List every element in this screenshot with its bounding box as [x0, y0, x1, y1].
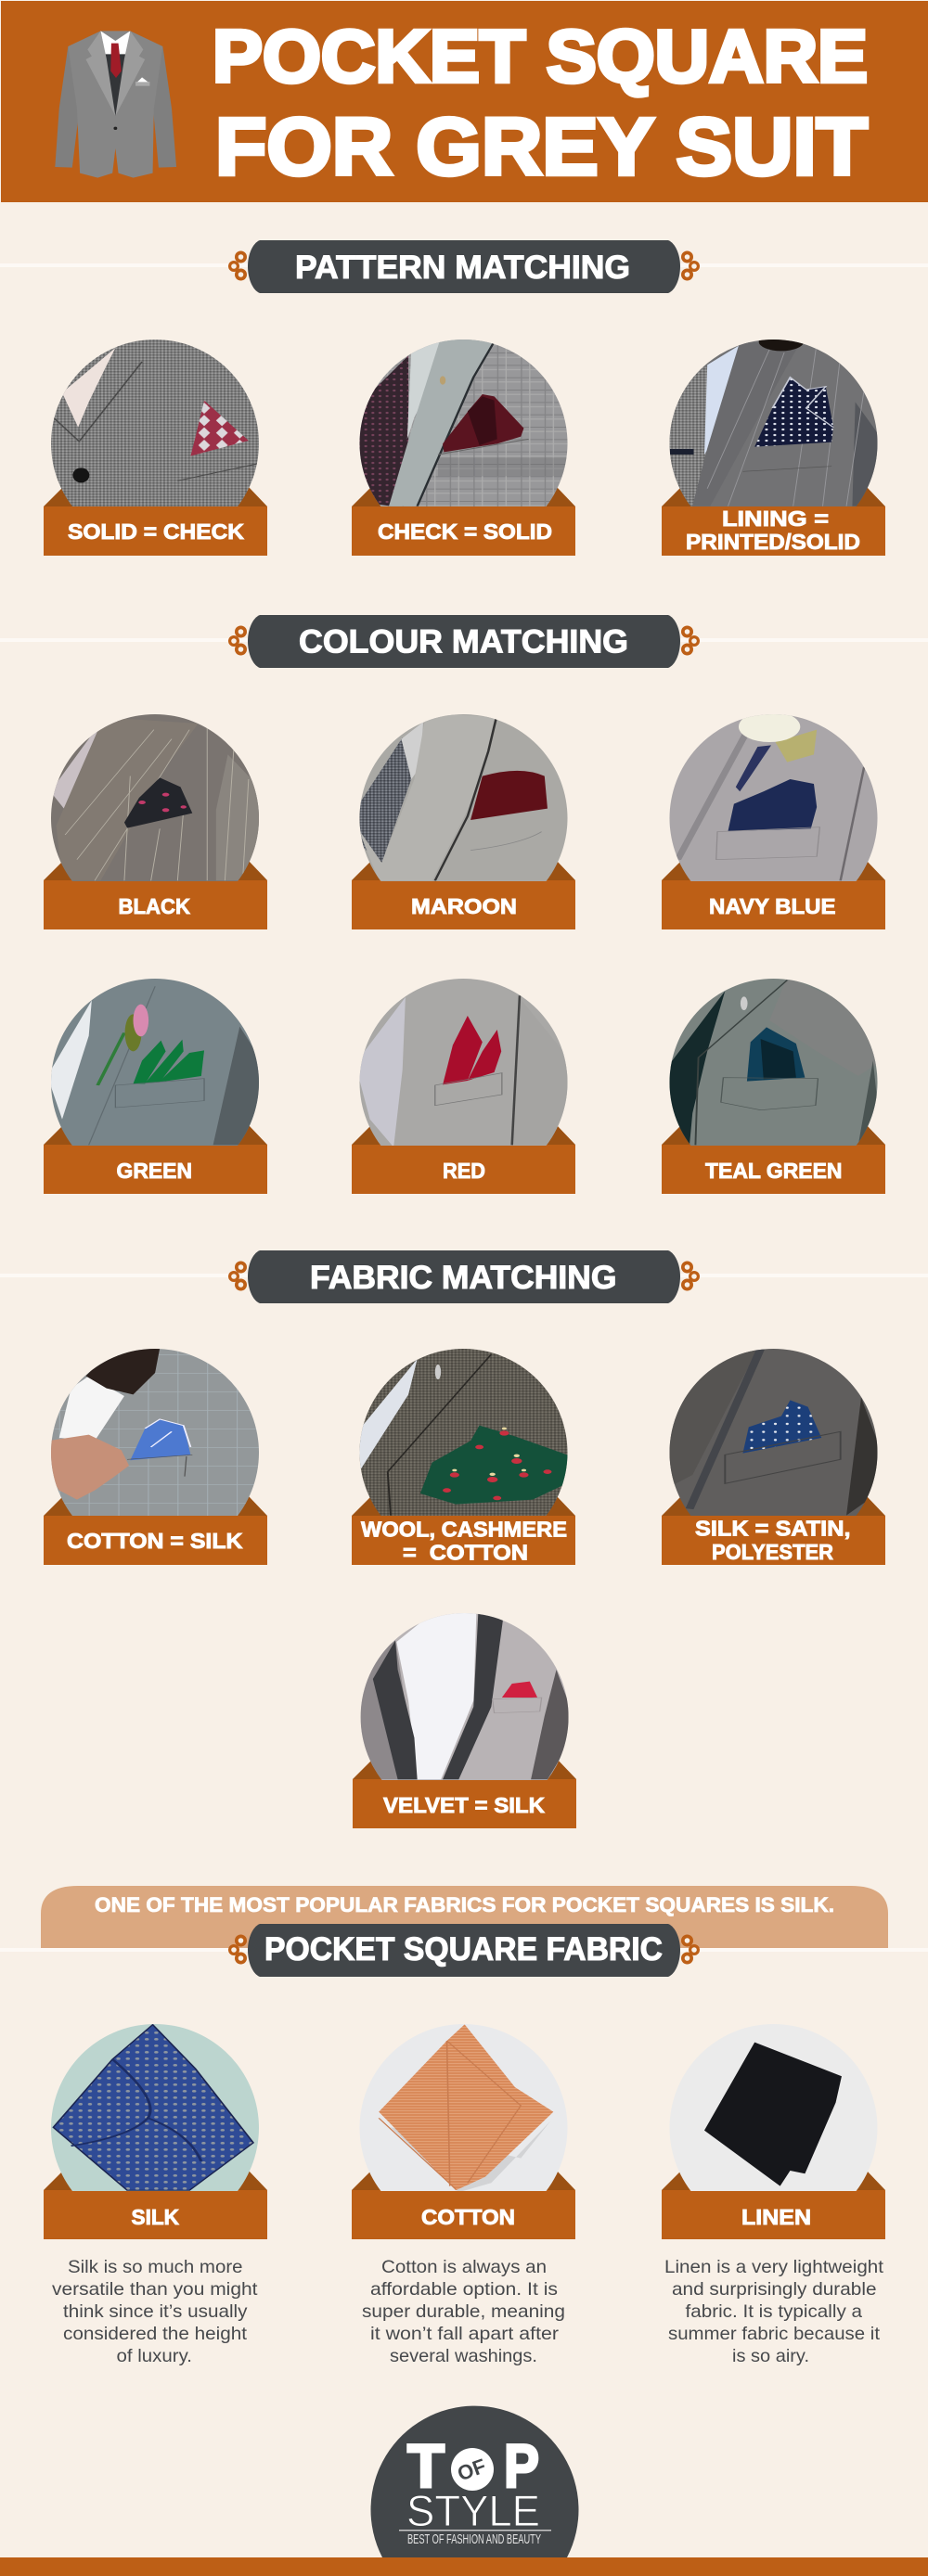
heading: pattern matching [228, 240, 700, 293]
text block: considered the height [63, 2324, 248, 2344]
label: LINING = [722, 506, 829, 531]
footer bar [0, 2557, 928, 2576]
photo: dark grey jacket with dotted blue square [670, 1349, 878, 1516]
photo: orange cotton square [360, 2024, 568, 2191]
label [686, 506, 860, 554]
label: POLYESTER [712, 1540, 833, 1564]
photo: man adjusting blue square [51, 1349, 259, 1516]
label: CHECK = SOLID [378, 519, 552, 544]
photo: plaid jacket with maroon square [360, 340, 568, 506]
photo: linen jacket with maroon square [360, 714, 568, 881]
photo: light grey jacket with red square [360, 979, 568, 1146]
icon: grey suit jacket [55, 31, 176, 178]
logo: top of style [371, 2406, 578, 2557]
heading: fabric matching: FABRIC MATCHING [310, 1260, 616, 1296]
text block [664, 2257, 884, 2366]
card: linen [662, 2024, 885, 2365]
card: green [44, 979, 267, 1194]
section lines [0, 263, 928, 1277]
text block: summer fabric because it [668, 2324, 881, 2344]
label: WOOL, CASHMERE [361, 1518, 567, 1542]
heading: fabric matching [228, 1250, 700, 1303]
text block: super durable, meaning [362, 2301, 565, 2322]
card: teal green [662, 979, 885, 1194]
label: COTTON [421, 2205, 515, 2229]
card: silk = satin, polyester [662, 1349, 885, 1565]
label: PRINTED/SOLID [686, 530, 860, 554]
card: solid = check [44, 340, 267, 556]
logo: top of style: T [407, 2431, 445, 2500]
photo: grey-green jacket with teal square [670, 979, 878, 1146]
heading: pocket square fabric: POCKET SQUARE FABRIC [264, 1931, 663, 1967]
label: TEAL GREEN [705, 1159, 843, 1183]
title: POCKET SQUARE [213, 15, 868, 97]
heading: pocket square fabric [228, 1924, 700, 1977]
logo: top of style: P [504, 2431, 539, 2500]
text block: Cotton is always an [381, 2257, 547, 2277]
label [361, 1518, 567, 1565]
label: SILK = SATIN, [695, 1517, 850, 1541]
label: = COTTON [403, 1541, 528, 1565]
card: silk [44, 2024, 267, 2365]
heading: colour matching [228, 615, 700, 668]
logo: top of style: BEST OF FASHION AND BEAUTY [407, 2531, 541, 2547]
heading: pattern matching: PATTERN MATCHING [295, 250, 630, 286]
photo: grey jacket with green square [51, 979, 259, 1146]
text block: is so airy. [732, 2346, 809, 2366]
label: BLACK [119, 894, 190, 918]
panel: colour matching [44, 615, 885, 1194]
card: navy blue [662, 714, 885, 929]
callout: silk popularity banner [41, 1886, 888, 1948]
photo: velvet jacket with shawl lapels [360, 1613, 569, 1780]
text block: affordable option. It is [370, 2279, 558, 2300]
label: NAVY BLUE [709, 894, 835, 918]
text block: think since it’s usually [63, 2301, 248, 2322]
photo: pinstripe jacket with dotted square [670, 340, 878, 506]
heading: colour matching: COLOUR MATCHING [299, 623, 628, 660]
title [213, 15, 868, 192]
text block: of luxury. [117, 2346, 192, 2366]
card: wool, cashmere = cotton [352, 1349, 575, 1565]
text block: several washings. [390, 2346, 537, 2366]
photo: grey tweed jacket with check square [51, 340, 259, 506]
photo: wool jacket with green floral square [360, 1349, 568, 1516]
text block: it won’t fall apart after [370, 2324, 560, 2344]
text block: versatile than you might [52, 2279, 258, 2300]
panel: pocket square fabric [44, 1924, 885, 2365]
label: SOLID = CHECK [68, 519, 244, 544]
label: SILK [132, 2205, 179, 2229]
card: cotton [352, 2024, 575, 2365]
text block: Silk is so much more [68, 2257, 243, 2277]
text block [52, 2257, 258, 2366]
panel: pattern matching [44, 240, 885, 556]
label [695, 1517, 850, 1564]
text block: fabric. It is typically a [685, 2301, 862, 2322]
label: LINEN [741, 2205, 811, 2229]
label: VELVET = SILK [383, 1793, 545, 1817]
text block [362, 2257, 565, 2366]
photo: black linen square [670, 2024, 878, 2191]
text block: and surprisingly durable [672, 2279, 876, 2300]
title: FOR GREY SUIT [215, 102, 868, 192]
callout: silk popularity banner: ONE OF THE MOST POPULAR FABRICS FOR POCKET SQUARES IS SILK. [95, 1893, 834, 1916]
label: MAROON [411, 894, 517, 918]
label: GREEN [117, 1159, 192, 1183]
panel: fabric matching [44, 1250, 885, 1828]
header banner [1, 1, 928, 202]
card: cotton = silk [44, 1349, 267, 1565]
photo: blue silk square [51, 2024, 259, 2191]
card: check = solid [352, 340, 575, 556]
card: black [44, 714, 267, 929]
label: RED [443, 1159, 485, 1183]
text block: Linen is a very lightweight [664, 2257, 884, 2277]
label: COTTON = SILK [67, 1529, 243, 1553]
photo: light jacket with navy square and flower [670, 714, 878, 881]
card: maroon [352, 714, 575, 929]
card: red [352, 979, 575, 1194]
logo: top of style: OF [455, 2454, 489, 2485]
logo: top of style: STYLE [406, 2486, 540, 2535]
card: lining = printed/solid [662, 340, 885, 556]
card: velvet = silk [353, 1613, 576, 1828]
photo: pinstripe jacket with black square [51, 714, 259, 881]
